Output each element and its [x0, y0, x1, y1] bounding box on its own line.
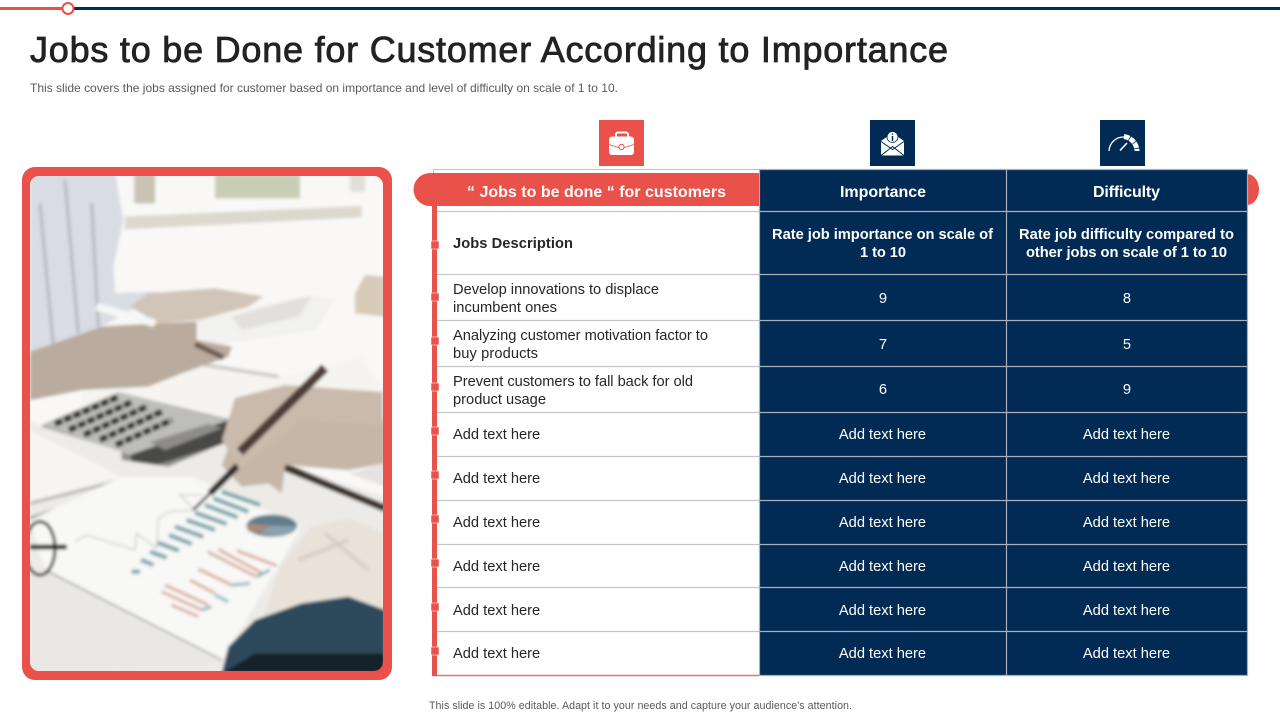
row 2: buy products: [453, 346, 538, 362]
row 3: Prevent customers to fall back for old: [453, 374, 693, 390]
top accent bar: [0, 3, 1280, 14]
row 4: Add text here: [839, 427, 926, 443]
panel: table: [414, 169, 1259, 676]
row 8: [453, 603, 1170, 619]
calculator: [41, 402, 230, 468]
column heading: difficulty: Difficulty: [1093, 184, 1160, 201]
row 9: Add text here: [1083, 646, 1170, 662]
lower-hand knuckles and pen: [222, 385, 383, 470]
row 1: [453, 282, 1131, 316]
row heading: jobs description: Jobs Description: [453, 236, 573, 252]
row 5: Add text here: [839, 471, 926, 487]
row 6: Add text here: [839, 515, 926, 531]
row 7: Add text here: [1083, 559, 1170, 575]
row 5: Add text here: [1083, 471, 1170, 487]
row 9: [453, 646, 1170, 662]
row 9: Add text here: [839, 646, 926, 662]
difficulty description: other jobs on scale of 1 to 10: [1026, 245, 1227, 261]
row 8: Add text here: [453, 603, 540, 619]
row 7: Add text here: [453, 559, 540, 575]
importance description: [772, 227, 993, 261]
row 3: product usage: [453, 392, 546, 408]
importance description: Rate job importance on scale of: [772, 227, 993, 243]
row 7: [453, 559, 1170, 575]
panel: photo frame: [22, 167, 392, 680]
footer note: This slide is 100% editable. Adapt it to your needs and capture your audience's attention.: [429, 700, 852, 712]
row 4: Add text here: [1083, 427, 1170, 443]
row 3: [453, 374, 1131, 408]
red header pill: [414, 173, 759, 206]
icon: briefcase: [599, 120, 644, 166]
icon: envelope with info badge: [870, 120, 915, 166]
row 1: 8: [1123, 291, 1131, 307]
icon: speedometer gauge: [1100, 120, 1145, 166]
difficulty description: [1019, 227, 1234, 261]
row 2: 5: [1123, 337, 1131, 353]
navy columns: [759, 169, 1248, 676]
subtitle: This slide covers the jobs assigned for customer based on importance and level of difficulty on scale of 1 to 10.: [30, 81, 618, 95]
row 2: Analyzing customer motivation factor to: [453, 328, 708, 344]
title: Jobs to be Done for Customer According to Importance: [30, 29, 948, 70]
row 1: 9: [879, 291, 887, 307]
row 5: Add text here: [453, 471, 540, 487]
row 4: Add text here: [453, 427, 540, 443]
row 6: Add text here: [453, 515, 540, 531]
row 9: Add text here: [453, 646, 540, 662]
row 6: [453, 515, 1170, 531]
importance description: 1 to 10: [860, 245, 906, 261]
red timeline rail: [431, 206, 439, 676]
row 3: 6: [879, 382, 887, 398]
right header cap: [1247, 174, 1259, 205]
row 7: Add text here: [839, 559, 926, 575]
row 2: 7: [879, 337, 887, 353]
row 4: [453, 427, 1170, 443]
row 8: Add text here: [839, 603, 926, 619]
row 8: Add text here: [1083, 603, 1170, 619]
red header pill: “ Jobs to be done “ for customers: [467, 184, 726, 201]
table outline: [434, 170, 760, 676]
column heading: importance: Importance: [840, 184, 926, 201]
photo: hands working on charts at desk: [25, 173, 385, 673]
row 6: Add text here: [1083, 515, 1170, 531]
row 5: [453, 471, 1170, 487]
difficulty description: Rate job difficulty compared to: [1019, 227, 1234, 243]
row 3: 9: [1123, 382, 1131, 398]
row 1: incumbent ones: [453, 300, 557, 316]
row 2: [453, 328, 1131, 362]
row 1: Develop innovations to displace: [453, 282, 659, 298]
